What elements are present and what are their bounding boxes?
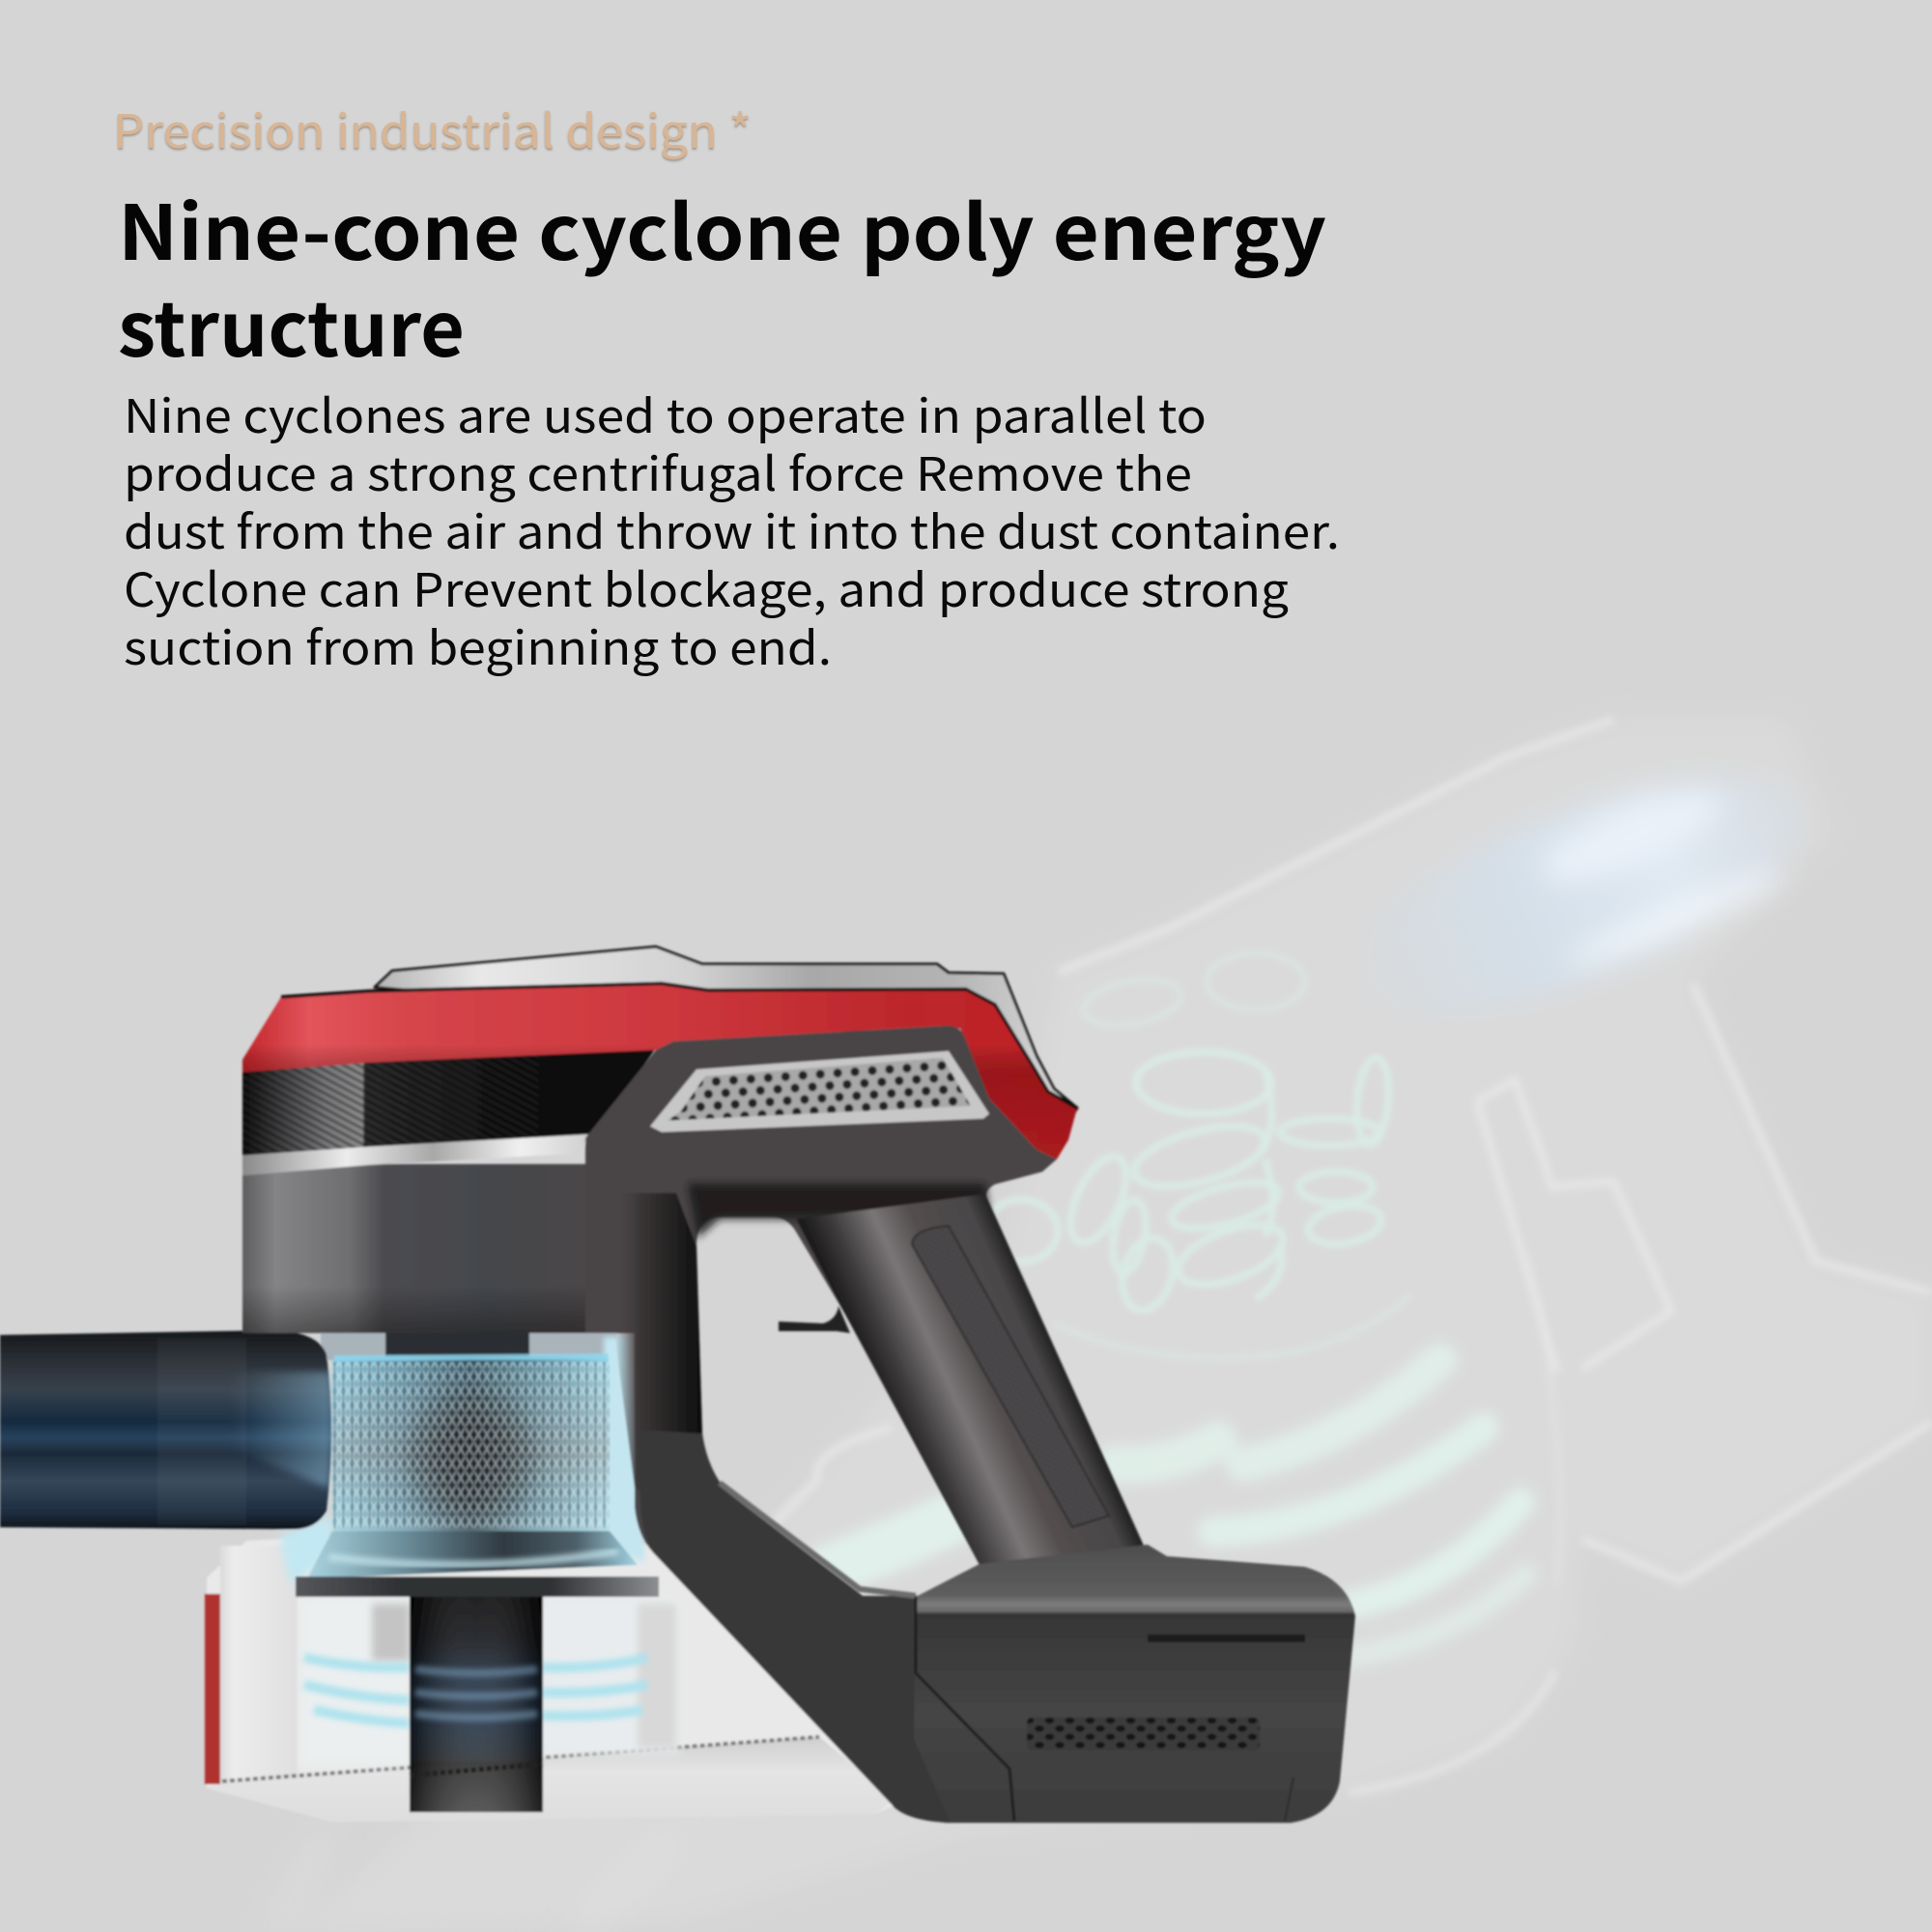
mesh drum — [332, 1356, 610, 1533]
vacuum tube — [0, 1330, 333, 1529]
dust bin — [205, 1536, 908, 1822]
mesh collar — [307, 1531, 638, 1578]
top silver cap — [375, 947, 1077, 1130]
mesh dark core — [418, 1399, 525, 1519]
ghost airflow glow — [1323, 729, 1833, 1062]
lower arm — [638, 1430, 951, 1823]
description paragraph: dust from the air and throw it into the dust container. — [124, 495, 1340, 562]
base corner seam — [1285, 1777, 1293, 1821]
upper vent — [650, 1051, 989, 1132]
carbon band — [242, 1048, 656, 1159]
dark column — [614, 1193, 720, 1507]
mesh top rim — [334, 1356, 609, 1358]
description paragraph: produce a strong centrifugal force Remove the — [124, 437, 1192, 504]
trigger — [779, 1306, 850, 1333]
cyclone rings in bin — [304, 1658, 647, 1723]
motor housing — [242, 1048, 656, 1333]
arm highlight — [720, 1483, 916, 1596]
chrome ring — [242, 1134, 591, 1176]
battery base — [914, 1545, 1355, 1823]
red bin stripe — [205, 1594, 220, 1784]
frame silhouette — [585, 1026, 1152, 1823]
ghost body silhouette — [290, 720, 1932, 1932]
red top edge line — [281, 983, 1077, 1108]
main title: structure — [118, 270, 465, 379]
hand grip — [796, 1194, 1152, 1565]
grip panel — [912, 1226, 1109, 1527]
bin seam — [222, 1737, 819, 1781]
description paragraph: Cyclone can Prevent blockage, and produce strong — [124, 553, 1289, 620]
bin inner light panels — [301, 1599, 679, 1765]
tube lighter segment — [157, 1338, 246, 1525]
mesh top shoulder — [321, 1331, 616, 1360]
collar plate — [296, 1577, 659, 1597]
ghost mint airflow bands — [831, 1360, 1526, 1657]
main title: Nine-cone cyclone poly energy — [118, 174, 1326, 282]
description paragraph: suction from beginning to end. — [124, 611, 832, 678]
ghost faint bottom streaks — [270, 1835, 676, 1932]
ghost outline — [773, 720, 1932, 1793]
ghost vacuum illustration — [270, 720, 1932, 1932]
red trim band — [242, 983, 1077, 1159]
eyebrow heading: Precision industrial design * — [113, 94, 752, 161]
mesh side glow — [604, 1337, 645, 1563]
ghost cyclone coils — [984, 953, 1410, 1358]
cyclone filter mesh — [280, 1331, 659, 1597]
description paragraph — [124, 379, 1340, 678]
handle frame — [585, 1026, 1152, 1823]
vacuum cleaner main unit — [0, 947, 1355, 1823]
base lower vent — [1027, 1718, 1260, 1750]
base seam — [916, 1597, 1014, 1821]
central dark column — [410, 1596, 543, 1812]
bin lower section — [207, 1737, 894, 1822]
frame underside shadow — [688, 1183, 989, 1238]
description paragraph: Nine cyclones are used to operate in parallel to — [124, 379, 1207, 446]
main title — [118, 174, 1326, 379]
tube end glow — [232, 1372, 333, 1488]
base top slot — [1148, 1634, 1305, 1642]
